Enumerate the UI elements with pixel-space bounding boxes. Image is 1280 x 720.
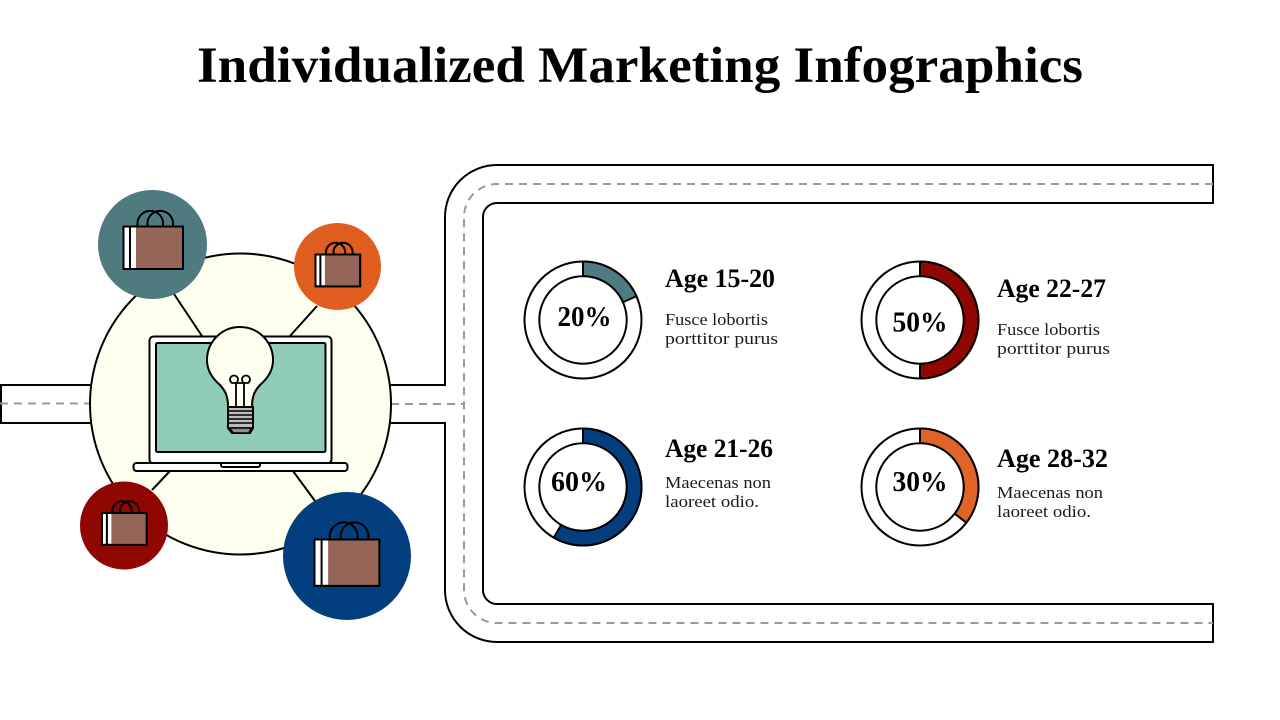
value: 30%: 30% bbox=[892, 466, 948, 498]
panel: age 28-32 bbox=[862, 428, 1108, 546]
donut chart: 60% bbox=[524, 428, 642, 546]
title: Individualized Marketing Infographics bbox=[197, 38, 1083, 94]
cream hub circle bbox=[90, 254, 391, 554]
hub: cream circle with laptop and shopping nodes bbox=[80, 190, 411, 620]
donut chart: 20% bbox=[524, 262, 642, 378]
node: teal shopping bag bbox=[98, 190, 207, 299]
node: orange shopping bag bbox=[294, 223, 381, 310]
description: Maecenas non bbox=[665, 473, 771, 492]
value: 20%: 20% bbox=[558, 301, 612, 333]
laptop bbox=[134, 336, 348, 471]
heading: Age 22-27 bbox=[997, 274, 1106, 303]
donut chart: 30% bbox=[862, 428, 978, 546]
description: Fusce lobortis bbox=[997, 320, 1100, 339]
heading: Age 21-26 bbox=[665, 434, 773, 463]
description: laoreet odio. bbox=[997, 502, 1091, 521]
description: laoreet odio. bbox=[665, 492, 759, 511]
node: blue shopping bag bbox=[283, 492, 411, 620]
panel: age 22-27 bbox=[862, 262, 1110, 378]
description: Fusce lobortis bbox=[665, 310, 768, 329]
panel: age 15-20 bbox=[524, 262, 778, 378]
road: right loop framing the age panel bbox=[389, 165, 1213, 642]
panel: age 21-26 bbox=[524, 428, 773, 546]
connector lines bbox=[152, 294, 317, 501]
heading: Age 15-20 bbox=[665, 264, 775, 293]
node: red shopping bag bbox=[80, 482, 168, 570]
donut chart: 50% bbox=[862, 262, 979, 378]
description: porttitor purus bbox=[665, 329, 778, 348]
description: porttitor purus bbox=[997, 339, 1110, 358]
road: left entry bbox=[0, 385, 92, 423]
description: Maecenas non bbox=[997, 483, 1103, 502]
value: 50%: 50% bbox=[892, 306, 948, 338]
heading: Age 28-32 bbox=[997, 444, 1108, 473]
icon: light bulb bbox=[207, 327, 273, 433]
value: 60%: 60% bbox=[551, 466, 607, 498]
